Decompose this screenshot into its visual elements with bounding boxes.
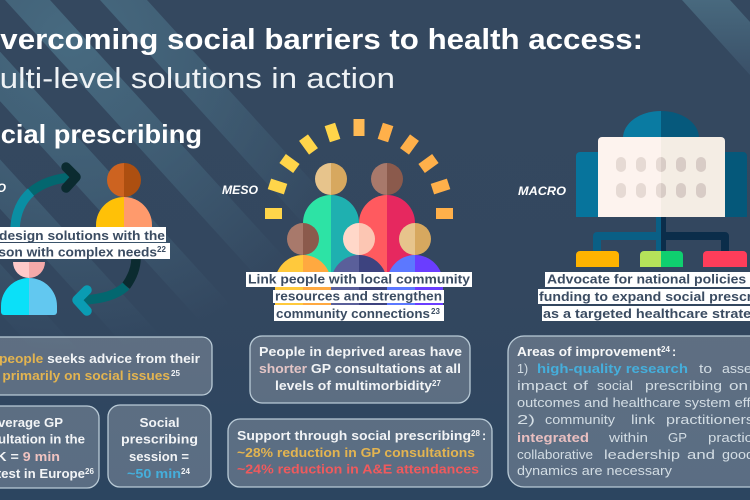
panel: support through social prescribing: Support through social prescribing (237, 429, 471, 443)
callout: meso community links: Link people with local community (248, 272, 470, 286)
panel: areas of improvement: high-quality research (537, 362, 688, 376)
icon: micro co-design cycle (1, 163, 152, 315)
panel: areas of improvement: and (687, 448, 715, 462)
callout: micro co-design (0, 227, 170, 260)
callout: macro advocacy: Advocate for national policies and (547, 272, 750, 286)
panel: average GP consultation (0, 406, 99, 488)
icon: macro institution and hierarchy (576, 111, 747, 267)
panel: areas of improvement: social (597, 379, 633, 393)
panel: micro GP advice (0, 337, 212, 395)
icon: front right person (387, 223, 443, 305)
panel: areas of improvement: integrated (517, 431, 589, 445)
panel: areas of improvement (508, 336, 750, 487)
panel: areas of improvement: GP (668, 431, 687, 445)
panel: areas of improvement: link (631, 413, 656, 427)
panel: support through social prescribing: ~28% reduction in GP consultations (237, 446, 475, 460)
icon: back left person (303, 163, 359, 273)
icon: person top right (96, 163, 152, 228)
callout: meso community links (246, 272, 472, 321)
icon: building wings (576, 152, 747, 217)
panel: areas of improvement: 1) (517, 362, 528, 376)
panel: deprived areas (250, 336, 470, 403)
panel: deprived areas: 27 (432, 379, 441, 388)
title (0, 24, 643, 95)
panel: support through social prescribing: ~24% reduction in A&E attendances (237, 462, 479, 476)
panel: areas of improvement: on (729, 379, 748, 393)
panel: areas of improvement: impact (517, 379, 568, 393)
callout: macro advocacy: as a targeted healthcare strategy (543, 307, 750, 321)
arrow: lower cycle arrow (77, 258, 136, 311)
panel: areas of improvement: leadership (604, 448, 680, 462)
icon: green box (640, 251, 683, 267)
panel: areas of improvement: to (699, 362, 712, 376)
icon: orange box (576, 251, 619, 267)
panel: deprived areas: shorter GP consultations at all (259, 362, 461, 376)
label: meso: MESO (222, 185, 258, 197)
callout: meso community links: community connections (276, 307, 430, 321)
panel: areas of improvement: 2) (517, 413, 535, 427)
icon: hierarchy connectors (593, 217, 729, 252)
icon: building dome (623, 111, 699, 138)
panel: areas of improvement: practitioners (666, 413, 750, 427)
icon: red box (703, 251, 747, 267)
panel: areas of improvement: dynamics are necessary (517, 464, 673, 478)
callout: meso community links: 23 (431, 307, 440, 316)
callout: meso community links: resources and strengthen (275, 290, 442, 304)
callout: micro co-design: 22 (157, 245, 166, 254)
panel: social prescribing session (108, 405, 211, 487)
panel: support through social prescribing: : (482, 429, 486, 443)
panel: areas of improvement: 24 (661, 345, 670, 354)
panel: areas of improvement: good (722, 448, 750, 462)
icon: building facade (598, 137, 725, 217)
panel: areas of improvement: outcomes and healthcare system efficiency (517, 396, 750, 410)
panel: areas of improvement: of (573, 379, 589, 393)
panel: social prescribing session: session = (129, 450, 189, 464)
panel: micro GP advice: 25 (171, 369, 180, 378)
icon: front left person (275, 223, 331, 305)
panel: deprived areas: levels of multimorbidity (275, 379, 432, 393)
icon: meso group of people (275, 163, 443, 305)
icon: meso sunburst rays (265, 119, 453, 219)
panel: average GP consultation: 26 (85, 467, 94, 476)
panel: areas of improvement: collaborative (517, 448, 593, 462)
panel: social prescribing session: ~50 min (127, 467, 181, 481)
panel: areas of improvement: community (545, 413, 616, 427)
panel: areas of improvement: prescribing (645, 379, 722, 393)
panel: areas of improvement: within (608, 431, 648, 445)
panel: support through social prescribing: 28 (471, 429, 480, 438)
icon: person bottom left (1, 262, 57, 315)
arrow: upper cycle arrow (15, 167, 76, 228)
panel: deprived areas: People in deprived areas have (259, 345, 462, 359)
icon: back right person (359, 163, 415, 273)
panel: social prescribing session: Social (140, 416, 180, 430)
panel: social prescribing session: 24 (181, 467, 190, 476)
callout: macro advocacy (538, 272, 750, 321)
panel: areas of improvement: Areas of improvement (517, 345, 662, 359)
panel: support through social prescribing (228, 419, 492, 487)
panel: social prescribing session: prescribing (121, 432, 198, 446)
icon: front middle person (331, 223, 387, 305)
label: macro: MACRO (518, 186, 566, 198)
panel: areas of improvement: : (672, 345, 676, 359)
